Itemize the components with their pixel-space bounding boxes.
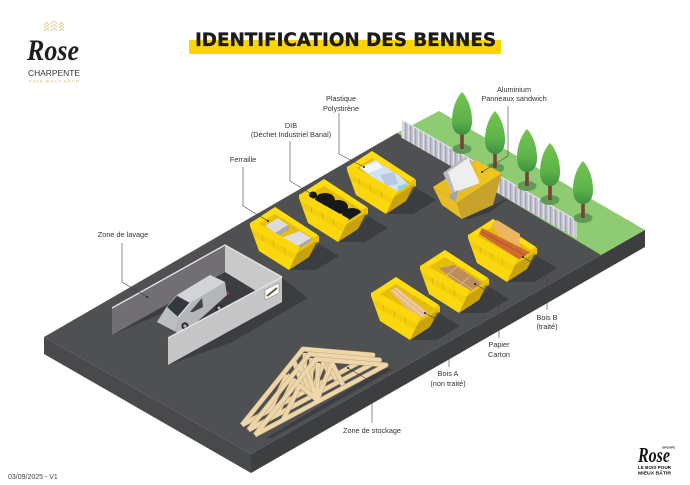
label: Bois A: (non traité) [430, 379, 466, 388]
label: Aluminium: Panneaux sandwich [481, 94, 547, 103]
label: Ferraille [230, 155, 269, 222]
skip: ferraille [250, 207, 339, 270]
skip: papier carton [420, 250, 509, 313]
label: Zone de stockage: Zone de stockage [343, 426, 401, 435]
far wall [225, 245, 282, 291]
label: Zone de lavage [98, 230, 148, 298]
skip: plastique [347, 151, 436, 214]
label: Plastique: Polystirène [323, 104, 359, 113]
label: DIB [251, 121, 331, 196]
logo: Rose Charpente: Rose [26, 34, 79, 67]
top edge of wall [112, 245, 282, 308]
van [157, 275, 229, 333]
label: Papier Carton: Papier [488, 340, 510, 349]
sign [265, 283, 279, 300]
cardboard [439, 265, 484, 294]
label: Papier Carton [474, 283, 510, 359]
plastic film [360, 160, 410, 197]
logo: Rose Charpente: POUR MIEUX BÂTIR [29, 78, 79, 84]
logo: Rose Charpente [26, 21, 81, 84]
label: Bois B: Bois B [536, 313, 558, 322]
metal plates [265, 218, 312, 251]
fence [402, 120, 576, 238]
label: Zone de lavage: Zone de lavage [98, 230, 148, 239]
date and version: 03/09/2025 - V1 [8, 474, 58, 481]
title: IDENTIFICATION DES BENNES [195, 29, 496, 51]
black bags [309, 192, 362, 222]
logo: Groupe Rose: LE BOIS POUR [638, 465, 672, 471]
skip: DIB [299, 179, 388, 242]
front wall [168, 277, 282, 365]
label: Plastique: Plastique [326, 94, 356, 103]
logo: Groupe Rose: Rose [637, 443, 670, 467]
platform [44, 111, 645, 473]
logo: Groupe Rose: MIEUX BÂTIR [638, 470, 672, 476]
storage trusses [242, 349, 393, 438]
label: DIB: (Déchet Industriel Banal) [251, 130, 331, 139]
trees [452, 92, 593, 223]
logo: Groupe Rose [637, 443, 675, 476]
logo: Groupe Rose: GROUPE [662, 446, 675, 450]
label: Zone de stockage [343, 367, 401, 435]
back wall [112, 245, 225, 335]
label: Bois A: Bois A [438, 369, 458, 378]
icon: chevrons [44, 21, 64, 31]
label: Aluminium [481, 85, 547, 173]
label: DIB: DIB [285, 121, 297, 130]
label: Papier Carton: Carton [488, 350, 510, 359]
label: Bois A [424, 312, 466, 388]
label: Aluminium: Aluminium [497, 85, 531, 94]
wash bay [112, 245, 308, 365]
label: Ferraille: Ferraille [230, 155, 256, 164]
skip: bois A [371, 277, 460, 340]
label: Bois B: (traité) [536, 322, 558, 331]
label: Plastique [323, 94, 365, 168]
panels [443, 158, 480, 203]
label: Bois B [522, 256, 558, 331]
skip: bois B [468, 219, 557, 282]
logo: Rose Charpente: CHARPENTE [28, 69, 81, 78]
planks [390, 287, 429, 321]
wood [479, 220, 533, 263]
skip: aluminium [433, 158, 509, 219]
